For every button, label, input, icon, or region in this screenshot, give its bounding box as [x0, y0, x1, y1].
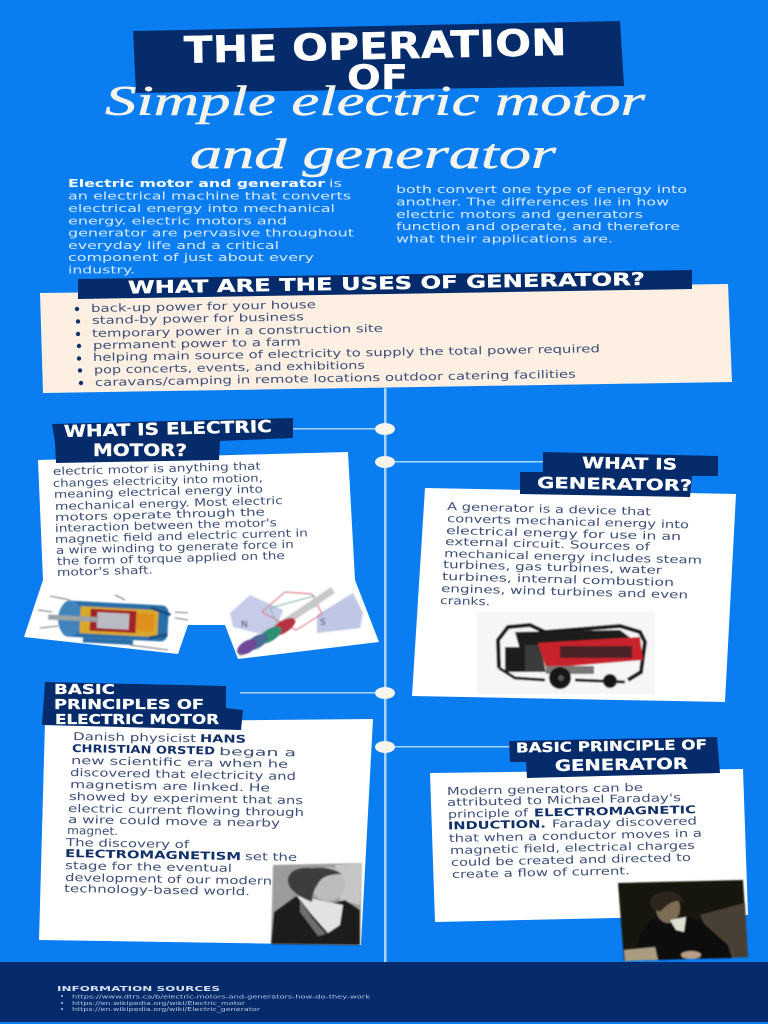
- motor principles text: HANS: [200, 732, 246, 746]
- intro text left column: [68, 177, 354, 276]
- generator description text: engines, wind turbines and even: [441, 582, 688, 601]
- generator principle text: attributed to Michael Faraday's: [447, 791, 682, 809]
- generator principle text: create a flow of current.: [452, 864, 630, 881]
- motor description text: electric motor is anything that: [53, 460, 261, 478]
- generator description text: electrical energy for use in an: [446, 524, 681, 543]
- generator description text: external circuit. Sources of: [445, 535, 650, 553]
- motor principles text: new scientific era when he: [71, 754, 289, 771]
- motor principles text: CHRISTIAN ORSTED: [72, 742, 215, 757]
- generator principle text: ELECTROMAGNETIC: [534, 803, 696, 819]
- motor principles text: electric current flowing through: [68, 802, 304, 819]
- list of generator uses: temporary power in a construction site: [92, 322, 383, 340]
- motor principles text: showed by experiment that ans: [69, 790, 304, 807]
- heading: basic principles of electric motor: ELECTRIC MOTOR: [55, 712, 220, 728]
- motor description text: meaning electrical energy into: [54, 483, 264, 501]
- script subtitle: [105, 79, 646, 178]
- heading: what is electric motor: MOTOR?: [93, 441, 187, 460]
- intro text right column: electric motors and generators: [396, 208, 644, 221]
- heading: uses of generator: [78, 270, 692, 299]
- motor description text: the form of torque applied on the: [57, 549, 285, 568]
- generator principle text: Faraday discovered: [552, 814, 697, 830]
- motor description text: [53, 460, 308, 579]
- intro text right column: [396, 183, 688, 246]
- motor principles text: technology-based world.: [64, 882, 250, 898]
- motor principles text: magnet.: [67, 824, 118, 838]
- intro text left column: component of just about every: [68, 251, 315, 264]
- motor principles text: The discovery of: [65, 836, 189, 851]
- panel: uses of generator: [40, 270, 732, 393]
- intro text left column: is: [329, 177, 343, 190]
- motor principles text: magnetism are linked. He: [70, 778, 271, 794]
- generator principle text: magnetic field, electrical charges: [450, 839, 696, 857]
- portrait: Michael Faraday: [618, 880, 748, 961]
- list of generator uses: [75, 298, 600, 389]
- motor principles text: set the: [245, 850, 298, 864]
- generator principle text: Modern generators can be: [447, 781, 644, 798]
- motor principles text: a wire could move a nearby: [68, 813, 281, 830]
- motor principles text: development of our modern: [65, 871, 272, 888]
- intro text left column: generator are pervasive throughout: [68, 226, 354, 240]
- generator description text: turbines, gas turbines, water: [443, 558, 663, 577]
- motor principles text: [64, 730, 304, 898]
- source links: [61, 994, 371, 1013]
- panel: what is electric motor: [24, 452, 379, 659]
- source links: https://www.dtrs.ca/b/electric-motors-and-generators-how-do-they-work: [72, 994, 371, 1000]
- generator description text: mechanical energy includes steam: [444, 547, 702, 567]
- intro text left column: energy. electric motors and: [68, 214, 287, 228]
- title banner: OF: [347, 58, 408, 98]
- motor description text: motors operate through the: [55, 505, 266, 524]
- heading: what is generator: WHAT IS: [582, 454, 677, 474]
- script subtitle: and generator: [190, 132, 557, 178]
- image: motor cutaway: [38, 595, 188, 650]
- list of generator uses: stand-by power for business: [92, 310, 305, 327]
- heading: basic principle of generator: [509, 737, 720, 778]
- generator principle text: that when a conductor moves in a: [449, 827, 702, 845]
- motor description text: mechanical energy. Most electric: [55, 494, 283, 513]
- footer: information sources: [0, 962, 768, 1022]
- motor principles text: discovered that electricity and: [70, 766, 296, 783]
- image: coil between magnets: [230, 590, 363, 658]
- image: coil between magnets: S: [320, 618, 326, 628]
- intro text left column: an electrical machine that converts: [68, 190, 352, 202]
- source links: https://en.wikipedia.org/wiki/Electric_generator: [72, 1007, 261, 1013]
- motor description text: a wire winding to generate force in: [56, 538, 294, 557]
- generator description text: converts mechanical energy into: [447, 512, 690, 531]
- motor description text: changes electricity into motion,: [53, 472, 263, 490]
- intro text left column: Electric motor and generator: [68, 177, 326, 190]
- portrait: Hans Christian Orsted: [271, 863, 362, 945]
- intro text right column: function and operate, and therefore: [396, 220, 681, 233]
- heading: what is electric motor: WHAT IS ELECTRIC: [64, 417, 272, 441]
- generator description text: [440, 500, 702, 608]
- panel: what is generator: [412, 488, 736, 702]
- generator description text: A generator is a device that: [447, 500, 651, 518]
- motor principles text: ELECTROMAGNETISM: [65, 847, 241, 863]
- motor description text: interaction between the motor's: [55, 516, 277, 535]
- source links: https://en.wikipedia.org/wiki/Electric_motor: [72, 1001, 246, 1007]
- heading: basic principle of generator: GENERATOR: [555, 755, 688, 775]
- title banner: THE OPERATION: [183, 21, 567, 72]
- heading: what is generator: [520, 452, 718, 497]
- intro text right column: both convert one type of energy into: [396, 183, 688, 196]
- motor description text: motor's shaft.: [57, 563, 153, 579]
- list of generator uses: helping main source of electricity to supply the total power required: [93, 342, 600, 364]
- script subtitle: Simple electric motor: [105, 79, 646, 125]
- intro text left column: electrical energy into mechanical: [68, 202, 335, 215]
- motor principles text: stage for the eventual: [65, 859, 232, 875]
- intro text right column: another. The differences lie in how: [396, 196, 669, 208]
- panel: basic principle of generator: [430, 769, 748, 961]
- heading: what is generator: GENERATOR?: [537, 474, 692, 495]
- title banner: [133, 21, 624, 98]
- heading: uses of generator: WHAT ARE THE USES OF GENERATOR?: [128, 270, 645, 298]
- heading: what is electric motor: [52, 417, 293, 463]
- motor principles text: began a: [219, 745, 296, 759]
- list of generator uses: back-up power for your house: [91, 298, 316, 315]
- generator description text: turbines, internal combustion: [442, 570, 674, 589]
- generator principle text: INDUCTION.: [448, 817, 546, 832]
- image: portable generator: [477, 612, 655, 694]
- intro text left column: everyday life and a critical: [68, 239, 279, 252]
- heading: basic principle of generator: BASIC PRINCIPLE OF: [516, 737, 707, 756]
- image: coil between magnets: N: [241, 620, 248, 630]
- generator principle text: [447, 781, 702, 881]
- list of generator uses: pop concerts, events, and exhibitions: [94, 359, 366, 376]
- heading: basic principles of electric motor: PRINCIPLES OF: [54, 697, 204, 713]
- motor principles text: Danish physicist: [73, 730, 196, 745]
- timeline spine and connectors: [240, 388, 545, 962]
- generator principle text: principle of: [448, 806, 528, 821]
- intro text right column: what their applications are.: [396, 232, 613, 246]
- list of generator uses: caravans/camping in remote locations outdoor catering facilities: [95, 368, 576, 389]
- heading: basic principles of electric motor: [42, 682, 243, 730]
- list of generator uses: permanent power to a farm: [93, 335, 301, 352]
- panel: basic principles of electric motor: [39, 719, 373, 945]
- footer heading: INFORMATION SOURCES: [57, 985, 220, 993]
- heading: basic principles of electric motor: BASIC: [54, 682, 115, 698]
- motor description text: magnetic field and electric current in: [55, 526, 308, 546]
- intro text left column: industry.: [68, 264, 135, 276]
- generator description text: cranks.: [440, 594, 490, 608]
- generator principle text: could be created and directed to: [451, 851, 692, 869]
